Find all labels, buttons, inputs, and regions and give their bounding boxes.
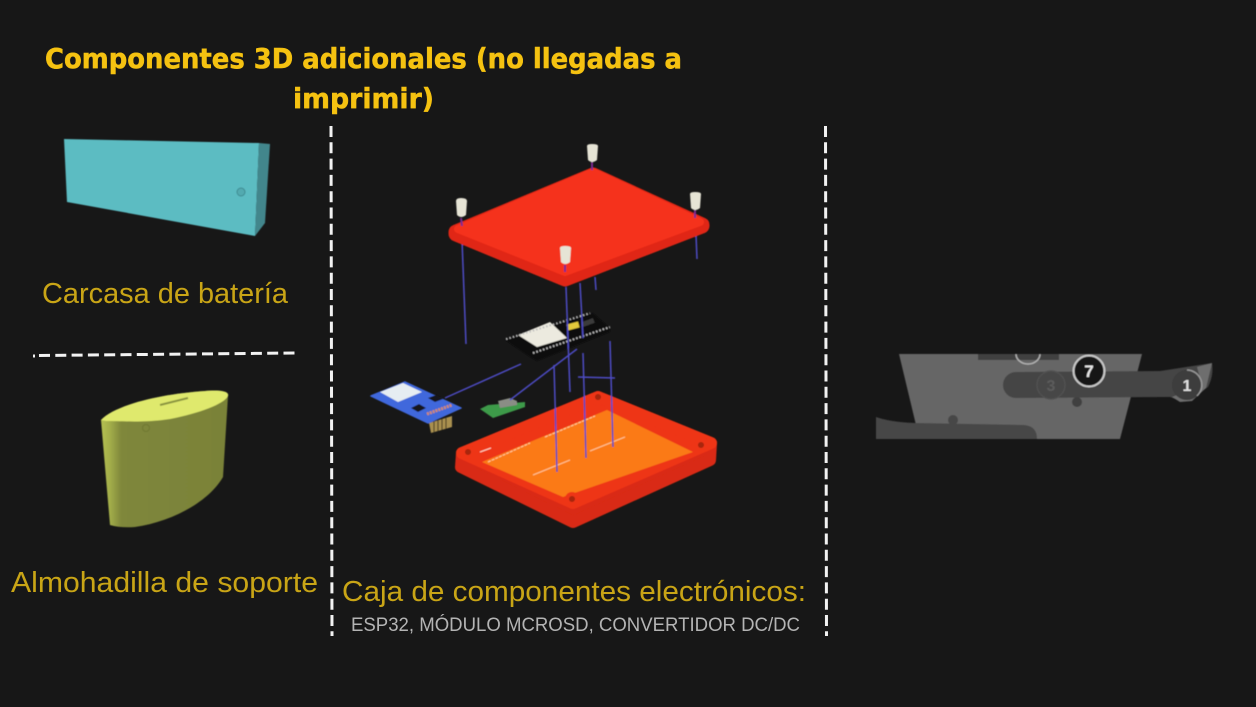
icon: battery case xyxy=(64,139,270,236)
faded device detail: 7 xyxy=(1084,362,1094,381)
assembly guide lines xyxy=(445,235,697,472)
enclosure lid xyxy=(456,162,702,279)
label: battery case: Carcasa de batería xyxy=(42,278,289,310)
title: Componentes 3D adicionales (no llegadas a xyxy=(45,42,682,75)
title xyxy=(45,42,682,115)
exploded electronics enclosure xyxy=(371,144,711,522)
lid screws xyxy=(456,144,701,264)
DC/DC converter xyxy=(480,398,525,418)
component list: ESP32, MÓDULO MCROSD, CONVERTIDOR DC/DC xyxy=(351,614,800,636)
ESP32 board xyxy=(505,313,610,361)
label: support pad: Almohadilla de soporte xyxy=(11,567,318,599)
label: electronics enclosure: Caja de componentes electrónicos: xyxy=(342,576,806,608)
label: electronics enclosure xyxy=(342,576,806,636)
enclosure base xyxy=(461,392,711,522)
icon: support pad xyxy=(101,391,228,527)
faded device detail xyxy=(876,354,1212,439)
faded device detail: 3 xyxy=(1047,378,1056,395)
title: imprimir) xyxy=(293,82,434,115)
faded device detail: 1 xyxy=(1183,378,1192,395)
dashed dividers xyxy=(33,126,826,636)
microSD module xyxy=(371,382,461,433)
